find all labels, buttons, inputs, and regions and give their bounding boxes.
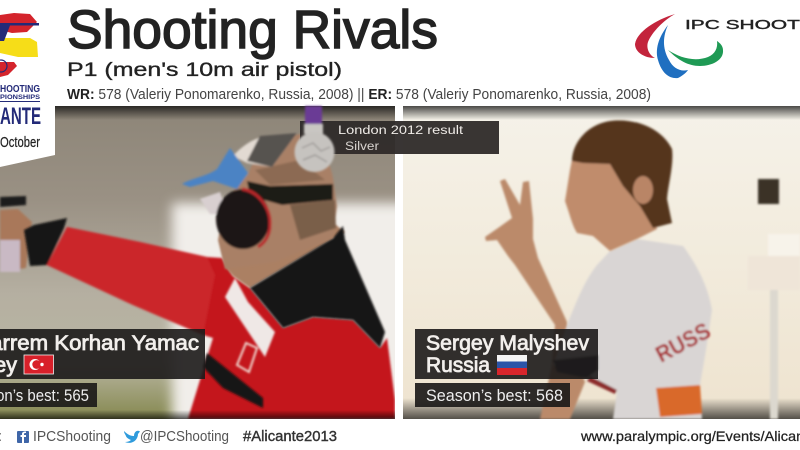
title: Shooting Rivals <box>67 0 438 60</box>
panel: left athlete name <box>0 329 205 379</box>
icon: IPC agitos logo <box>635 14 723 78</box>
head <box>182 133 337 269</box>
icon: Turkish flag <box>24 355 54 374</box>
photo: right rival <box>403 106 800 419</box>
jacket yoke and trim <box>203 226 385 408</box>
logo text: event name: HOOTING <box>0 83 40 95</box>
Facebook handle: IPCShooting <box>33 428 111 445</box>
shirt <box>553 239 715 419</box>
icon: silver medal <box>294 106 334 172</box>
neck <box>220 225 345 288</box>
bottom photo shadow <box>0 410 395 419</box>
icon: Twitter <box>124 431 140 443</box>
pistol and hand <box>0 196 32 272</box>
footer social links <box>0 428 337 445</box>
panel: logo card <box>0 13 55 167</box>
panel: right athlete name <box>415 329 598 379</box>
logo text: dates: October <box>0 135 40 151</box>
icon: Facebook <box>17 431 29 443</box>
icon: Russian flag <box>497 355 527 375</box>
athlete country: Russia <box>426 353 490 377</box>
arm and jacket <box>24 218 395 419</box>
panel: right season best: Season’s best: 568 <box>426 387 563 405</box>
photo: left shooter <box>0 106 412 433</box>
logo text: event name: PIONSHIPS <box>0 94 41 101</box>
Twitter handle: @IPCShooting <box>140 428 229 445</box>
subtitle: P1 (men's 10m air pistol) <box>67 59 342 81</box>
records line: WR: 578 (Valeriy Ponomarenko, Russia, 2008) || ER: 578 (Valeriy Ponomarenko, Russia, 2008) <box>67 87 651 103</box>
hashtag: #Alicante2013 <box>243 428 337 445</box>
IPC shooting logotype: IPC SHOOTING <box>685 17 800 32</box>
athlete name: Sergey Malyshev <box>426 331 589 355</box>
raised arm and hand <box>485 179 585 419</box>
background target stand <box>756 177 800 419</box>
logo text: event name: ANTE <box>0 103 41 130</box>
icon: Spanish flag map <box>0 13 39 77</box>
face and hair <box>565 120 672 251</box>
panel: right season best <box>415 383 570 407</box>
shirt: RUSS <box>651 317 715 367</box>
panel: London 2012 result <box>300 121 499 154</box>
callout value: Silver <box>345 141 379 153</box>
callout label: London 2012 result <box>338 125 464 137</box>
logo text: event name <box>0 83 41 130</box>
